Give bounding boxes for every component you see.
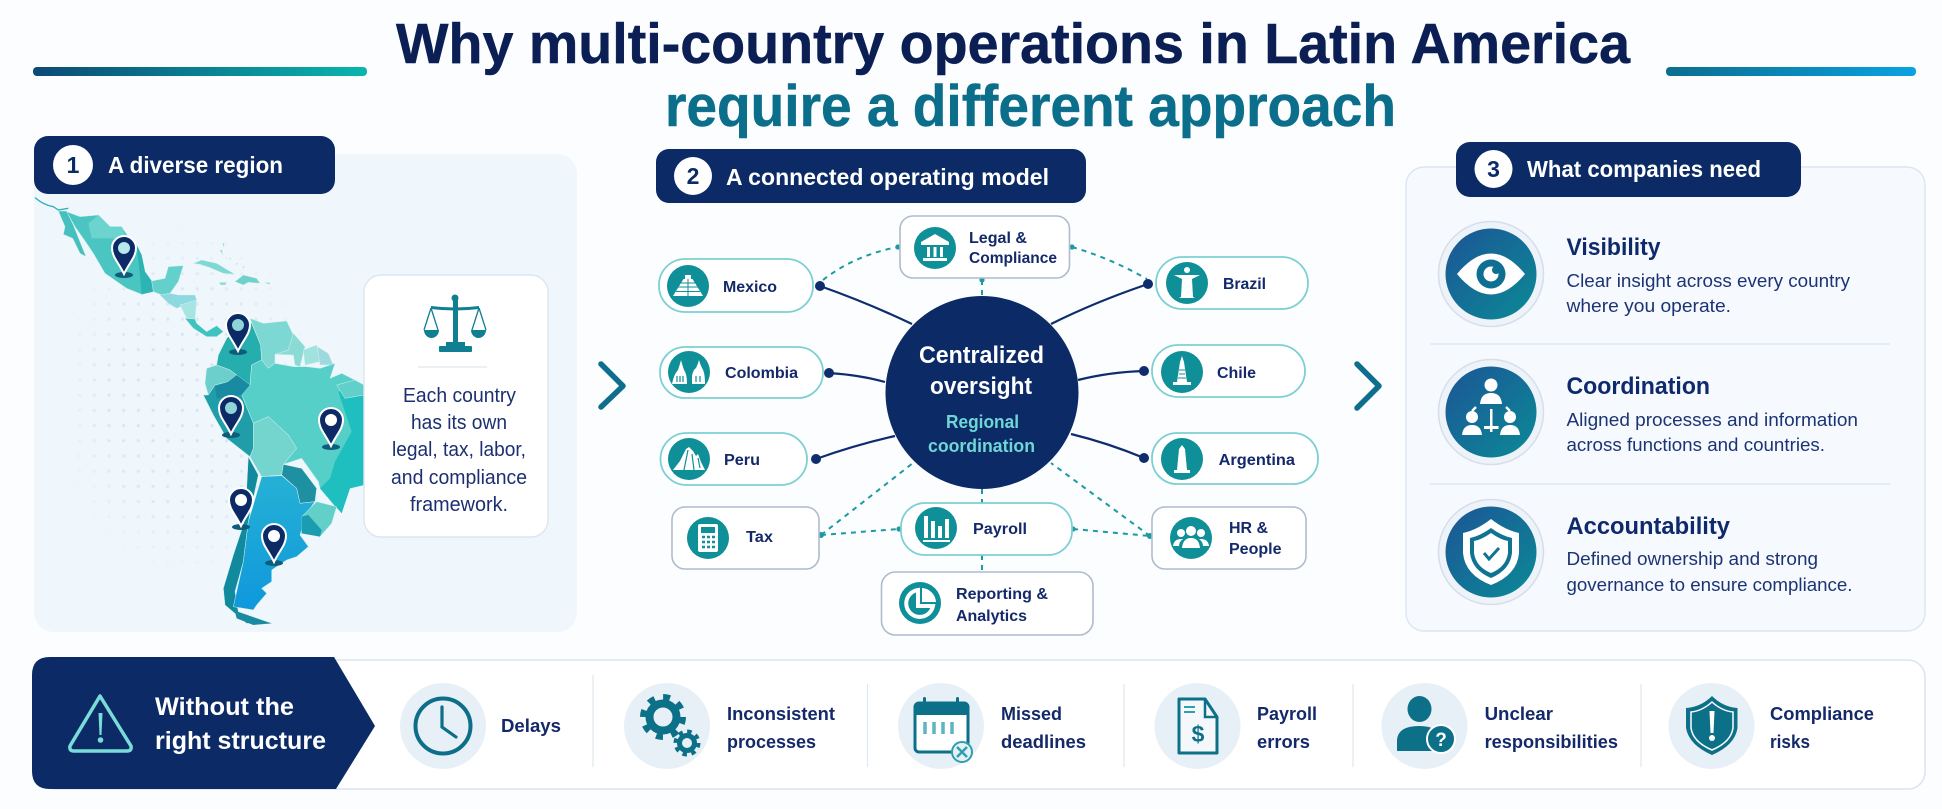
node: Brazil: [1156, 257, 1308, 309]
node: Mexico: [659, 259, 813, 312]
heading: a diverse region: [34, 136, 335, 194]
map pin: Chile: [229, 488, 253, 530]
callout text: [391, 384, 527, 516]
dashed connectors: [818, 244, 1153, 572]
panel: a diverse region: [34, 136, 577, 632]
icon: clock: [416, 698, 470, 754]
callout text: framework.: [410, 493, 508, 516]
banner: without the right structure: [32, 657, 375, 789]
title: Why multi-country operations in Latin America: [396, 12, 1631, 76]
heading: a diverse region: 1: [67, 152, 80, 178]
icon: scales: [424, 294, 486, 352]
item: visibility: where you operate.: [1565, 295, 1731, 316]
icon: invoice: $: [1192, 721, 1205, 747]
panel: connected operating model: [656, 149, 1318, 635]
icon: warning triangle: [70, 696, 131, 751]
node: Tax: Tax: [746, 529, 773, 546]
risk: inconsistent processes: processes: [727, 731, 816, 752]
node: Payroll: [901, 503, 1072, 555]
item: visibility: [1438, 222, 1851, 326]
node: HR and People: [1152, 507, 1306, 569]
icon: eye: [1438, 222, 1544, 326]
risk: missed deadlines: deadlines: [1001, 731, 1086, 752]
node: Legal and Compliance: Legal &: [969, 230, 1027, 247]
risk: delays: [400, 683, 561, 769]
arrow: chevron 1: [601, 364, 623, 407]
heading: what companies need: What companies need: [1527, 156, 1761, 182]
heading: a diverse region: A diverse region: [108, 152, 283, 178]
node: Colombia: Colombia: [725, 365, 798, 382]
node: Brazil: Brazil: [1223, 276, 1266, 293]
panel: what companies need: [1406, 142, 1925, 631]
risk: unclear responsibilities: Unclear: [1485, 703, 1553, 724]
node: Argentina: [1152, 433, 1318, 484]
solid connectors: [811, 279, 1153, 464]
map of Latin America: [35, 198, 364, 625]
icon: invoice: [1179, 699, 1217, 753]
heading: connected operating model: A connected operating model: [726, 164, 1049, 190]
map pin: Mexico: [112, 236, 136, 278]
node: Colombia: [660, 347, 823, 398]
item: coordination: across functions and countries.: [1566, 434, 1825, 455]
node: Legal and Compliance: Compliance: [969, 250, 1057, 267]
heading: what companies need: [1456, 142, 1801, 197]
panel: without the right structure: [32, 657, 1925, 789]
risk: payroll errors: Payroll: [1257, 703, 1317, 724]
callout text: legal, tax, labor,: [392, 438, 526, 461]
map pin: Brazil: [319, 408, 343, 450]
icon: people network: [1438, 360, 1544, 464]
map pin: Colombia: [226, 313, 250, 355]
node: Chile: Chile: [1217, 365, 1256, 382]
item: accountability: Accountability: [1566, 513, 1731, 540]
centre hub: centralized oversight: Regional: [946, 411, 1019, 432]
risk: inconsistent processes: Inconsistent: [727, 703, 835, 724]
item: visibility: Clear insight across every country: [1566, 270, 1851, 291]
node: HR and People: People: [1229, 541, 1282, 558]
risk: unclear responsibilities: [1382, 683, 1618, 769]
icon: gears: [643, 697, 698, 754]
map pin: Argentina: [262, 524, 286, 566]
node: Reporting and Analytics: Analytics: [956, 608, 1027, 625]
callout text: has its own: [411, 411, 507, 434]
node: Peru: [660, 433, 807, 485]
icon: person with question mark: ?: [1435, 730, 1447, 751]
icon: shield check: [1438, 500, 1544, 604]
risk: unclear responsibilities: responsibilities: [1485, 731, 1618, 752]
node: Tax: [672, 507, 819, 569]
node: Chile: [1152, 345, 1305, 397]
item: accountability: [1438, 500, 1852, 604]
node: Reporting and Analytics: Reporting &: [956, 586, 1048, 603]
map pin: Peru: [219, 396, 243, 438]
node: Reporting and Analytics: [882, 572, 1093, 635]
banner: without the right structure: Without the: [155, 693, 294, 721]
node: Mexico: Mexico: [723, 279, 777, 296]
centre hub: centralized oversight: oversight: [930, 373, 1032, 400]
risk: payroll errors: [1154, 683, 1317, 769]
centre hub: centralized oversight: [886, 296, 1078, 489]
risk: payroll errors: errors: [1257, 731, 1310, 752]
node: Payroll: Payroll: [973, 521, 1027, 538]
heading: what companies need: 3: [1487, 156, 1500, 182]
node: HR and People: HR &: [1229, 520, 1268, 537]
title: require a different approach: [665, 74, 1396, 139]
item: accountability: Defined ownership and strong: [1566, 548, 1818, 569]
title: [396, 12, 1631, 139]
risk: missed deadlines: Missed: [1001, 703, 1062, 724]
centre hub: centralized oversight: Centralized: [919, 342, 1044, 369]
callout: each country: [364, 275, 548, 537]
icon: person with question mark: [1397, 696, 1455, 753]
risk: delays: Delays: [501, 715, 561, 736]
icon: warning shield: [1686, 696, 1738, 755]
risk: missed deadlines: [898, 683, 1086, 769]
arrow: chevron 2: [1357, 364, 1379, 408]
callout text: Each country: [403, 384, 517, 407]
node: Argentina: Argentina: [1219, 452, 1295, 469]
risk: compliance risks: Compliance: [1770, 703, 1874, 724]
icon: calendar: [915, 697, 972, 762]
item: coordination: [1438, 360, 1858, 464]
callout text: and compliance: [391, 466, 527, 489]
node: Peru: Peru: [724, 452, 760, 469]
item: coordination: Coordination: [1566, 373, 1710, 400]
risk: compliance risks: risks: [1770, 731, 1810, 752]
node: Legal and Compliance: [900, 216, 1070, 278]
risk: compliance risks: [1668, 683, 1874, 769]
centre hub: centralized oversight: coordination: [928, 435, 1035, 456]
item: accountability: governance to ensure compliance.: [1566, 574, 1852, 595]
risk: inconsistent processes: [624, 683, 835, 769]
item: coordination: Aligned processes and information: [1566, 409, 1858, 430]
heading: connected operating model: 2: [687, 163, 699, 189]
heading: connected operating model: [656, 149, 1086, 203]
item: visibility: Visibility: [1566, 234, 1661, 261]
banner: without the right structure: right structure: [155, 727, 326, 755]
